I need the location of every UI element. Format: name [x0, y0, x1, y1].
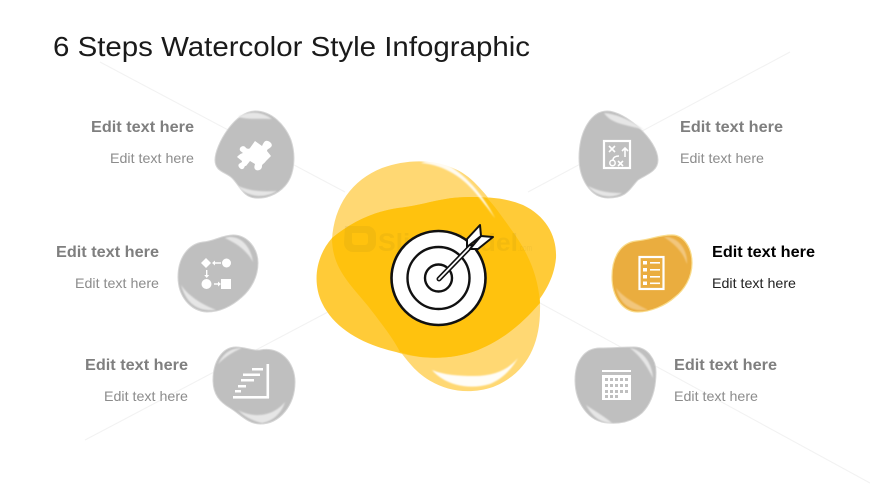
blob — [215, 111, 294, 198]
watermark — [344, 226, 532, 257]
text: Edit text here — [110, 150, 194, 166]
blob: upper and lower egg — [332, 161, 540, 391]
blob: wide lobe — [317, 197, 556, 358]
blob highlight bottom — [432, 358, 518, 387]
heading: Edit text here — [85, 357, 188, 374]
icon: strategy notebook — [604, 141, 630, 168]
heading: Edit text here — [91, 119, 194, 136]
blob overlap — [332, 197, 540, 358]
text: Edit text here — [75, 275, 159, 291]
icon: checklist — [640, 257, 664, 289]
step 6: calendar — [575, 347, 777, 423]
step 2: flowchart — [56, 235, 258, 312]
heading: Edit text here — [56, 244, 159, 261]
heading: Edit text here — [680, 119, 783, 136]
blob — [178, 235, 258, 312]
blob highlight top — [421, 161, 495, 218]
icon: puzzle piece — [237, 141, 272, 170]
blob — [612, 235, 692, 312]
heading: Edit text here — [712, 244, 815, 261]
blob — [579, 111, 658, 198]
blob — [575, 347, 656, 423]
icon: target with arrow — [392, 225, 493, 325]
text: Edit text here — [680, 150, 764, 166]
step 3: gantt — [85, 347, 295, 424]
step 1: puzzle — [91, 111, 294, 198]
icon: staircase chart — [233, 364, 269, 399]
watermark: SlideModel — [378, 229, 518, 257]
text: Edit text here — [104, 388, 188, 404]
step 5: checklist (active) — [612, 235, 815, 312]
watermark: .com — [518, 243, 532, 253]
icon: flowchart — [201, 258, 231, 289]
title: 6 Steps Watercolor Style Infographic — [53, 31, 530, 62]
blob — [213, 347, 295, 424]
icon: calendar — [602, 370, 631, 400]
step 4: strategy — [579, 111, 783, 198]
central watercolor blob with target — [317, 161, 556, 391]
heading: Edit text here — [674, 357, 777, 374]
text: Edit text here — [674, 388, 758, 404]
text: Edit text here — [712, 275, 796, 291]
